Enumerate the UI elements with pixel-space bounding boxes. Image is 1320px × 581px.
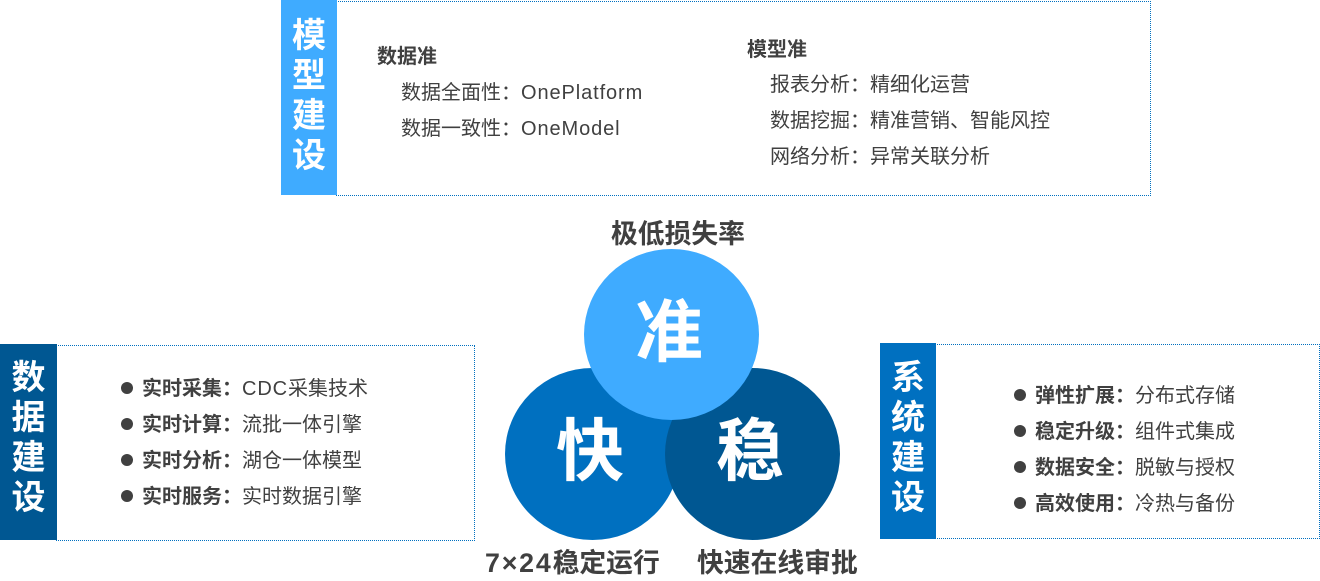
circle: 快 [505, 368, 680, 540]
panel: 系统建设 [880, 343, 1320, 539]
panel heading: 数据建设 [0, 344, 57, 540]
panel border [56, 345, 475, 541]
text: 实时服务: 实时服务：实时数据引擎 [142, 486, 362, 508]
label: 快速在线审批: 快速在线审批 [697, 548, 858, 578]
panel heading: 系统建设: 建 [891, 439, 925, 477]
panel heading: 系统建设: 统 [891, 399, 925, 437]
text: 数据安全: 数据安全：脱敏与授权 [1035, 457, 1235, 479]
text: 稳定升级: 稳定升级：组件式集成 [1035, 421, 1235, 443]
heading: 模型准: 模型准 [747, 39, 807, 61]
bullet [1014, 461, 1026, 473]
panel heading: 数据建设: 据 [12, 399, 46, 437]
circle: 准 [584, 249, 759, 420]
panel heading: 系统建设: 设 [891, 479, 925, 517]
text: 数据一致性: 数据一致性：OneModel [401, 118, 620, 140]
label: 极低损失率: 极低损失率 [611, 219, 745, 249]
text: 实时计算: 实时计算：流批一体引擎 [142, 414, 362, 436]
bullet [1014, 425, 1026, 437]
panel heading: 模型建设: 型 [292, 57, 326, 95]
character: 准: 准 [635, 295, 703, 371]
character: 快: 快 [556, 414, 624, 490]
text: 弹性扩展: 弹性扩展：分布式存储 [1035, 385, 1235, 407]
circle: 稳 [665, 368, 840, 540]
label: 7×24稳定运行: 7×24稳定运行 [485, 548, 660, 578]
panel heading: 数据建设: 设 [12, 479, 46, 517]
text: 高效使用: 高效使用：冷热与备份 [1035, 493, 1235, 515]
diagram: 准快稳 circles [485, 219, 858, 578]
text: 网络分析: 网络分析：异常关联分析 [770, 146, 990, 168]
panel: 数据建设 [0, 344, 475, 541]
bullet [121, 382, 133, 394]
panel heading: 系统建设 [880, 343, 936, 539]
panel: 模型建设 [281, 0, 1151, 196]
panel heading: 系统建设: 系 [891, 359, 925, 397]
text: 数据挖掘: 数据挖掘：精准营销、智能风控 [770, 110, 1050, 132]
text: 实时分析: 实时分析：湖仓一体模型 [142, 450, 362, 472]
bullet [121, 418, 133, 430]
text: 数据全面性: 数据全面性：OnePlatform [401, 82, 643, 104]
bullet [121, 454, 133, 466]
panel heading: 数据建设: 数 [12, 359, 46, 397]
bullet [1014, 497, 1026, 509]
panel heading: 模型建设: 模 [292, 17, 326, 55]
text: 报表分析: 报表分析：精细化运营 [770, 74, 970, 96]
bullet [121, 490, 133, 502]
heading: 数据准: 数据准 [377, 46, 437, 68]
panel heading: 模型建设: 设 [292, 137, 326, 175]
character: 稳: 稳 [716, 414, 784, 490]
bullet [1014, 389, 1026, 401]
panel border [336, 1, 1151, 196]
panel border [935, 344, 1320, 539]
panel heading: 模型建设: 建 [292, 97, 326, 135]
text: 实时采集: 实时采集：CDC采集技术 [142, 378, 368, 400]
panel heading: 数据建设: 建 [12, 439, 46, 477]
panel heading: 模型建设 [281, 0, 337, 195]
